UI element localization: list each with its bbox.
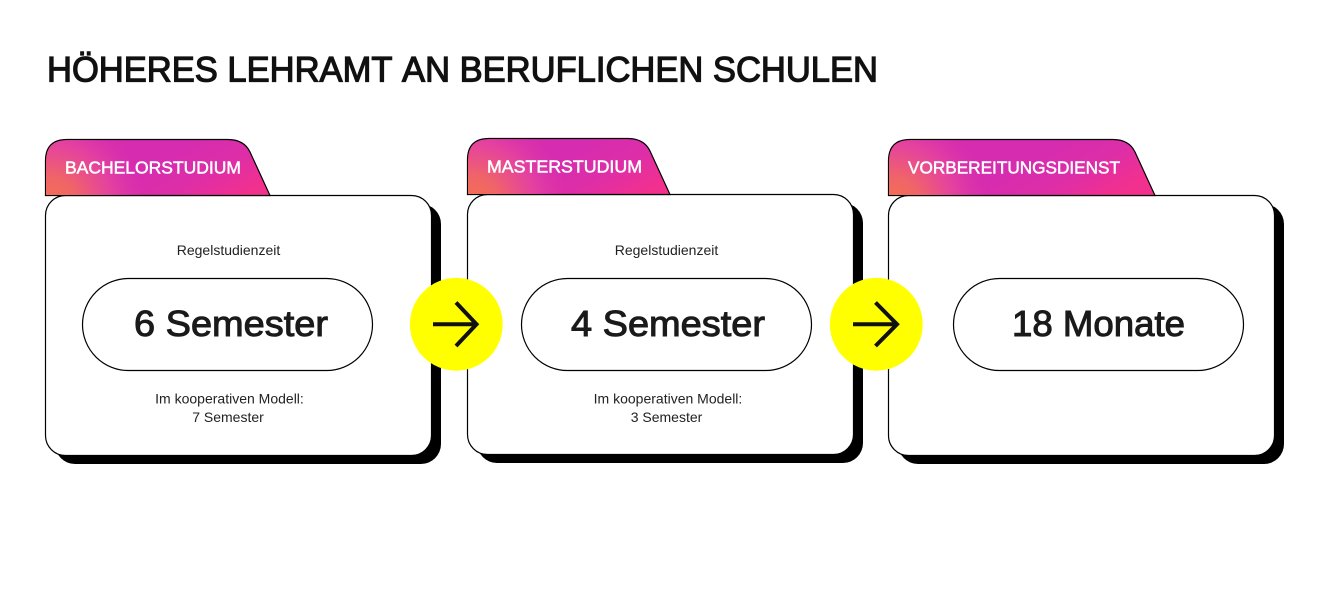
pill: 18 Monate — [954, 278, 1244, 370]
card shadow — [55, 204, 441, 464]
card shadow — [898, 204, 1284, 464]
tab label: VORBEREITUNGSDIENST — [908, 157, 1120, 177]
pill: 4 Semester — [522, 278, 812, 370]
note: kooperatives Modell: 3 Semester — [631, 409, 703, 425]
card body — [46, 196, 432, 456]
panel: Bachelorstudium — [46, 140, 441, 464]
tab — [468, 138, 670, 194]
label: Regelstudienzeit: Regelstudienzeit — [177, 242, 280, 258]
panel: Masterstudium — [468, 138, 863, 463]
tab — [888, 140, 1155, 196]
note: kooperatives Modell: 7 Semester — [192, 409, 264, 425]
card body — [888, 196, 1274, 456]
label: Regelstudienzeit: Regelstudienzeit — [615, 242, 718, 258]
arrow 2 — [830, 278, 923, 371]
arrow 1 — [410, 278, 503, 371]
pill: 4 Semester: 4 Semester — [571, 303, 765, 344]
tab label: MASTERSTUDIUM — [487, 156, 642, 176]
pill: 18 Monate: 18 Monate — [1012, 303, 1185, 344]
note: kooperatives Modell: Im kooperativen Modell: — [594, 390, 742, 406]
note: kooperatives Modell — [594, 390, 742, 425]
pill: 6 Semester: 6 Semester — [134, 303, 328, 344]
tab — [46, 140, 270, 196]
panel: Vorbereitungsdienst — [888, 140, 1284, 464]
note: kooperatives Modell: Im kooperativen Modell: — [155, 390, 304, 406]
card body — [468, 194, 854, 454]
tab label: BACHELORSTUDIUM — [65, 157, 241, 177]
title: HÖHERES LEHRAMT AN BERUFLICHEN SCHULEN — [47, 50, 878, 90]
card shadow — [477, 203, 863, 463]
pill: 6 Semester — [82, 278, 372, 370]
note: kooperatives Modell — [155, 390, 304, 425]
